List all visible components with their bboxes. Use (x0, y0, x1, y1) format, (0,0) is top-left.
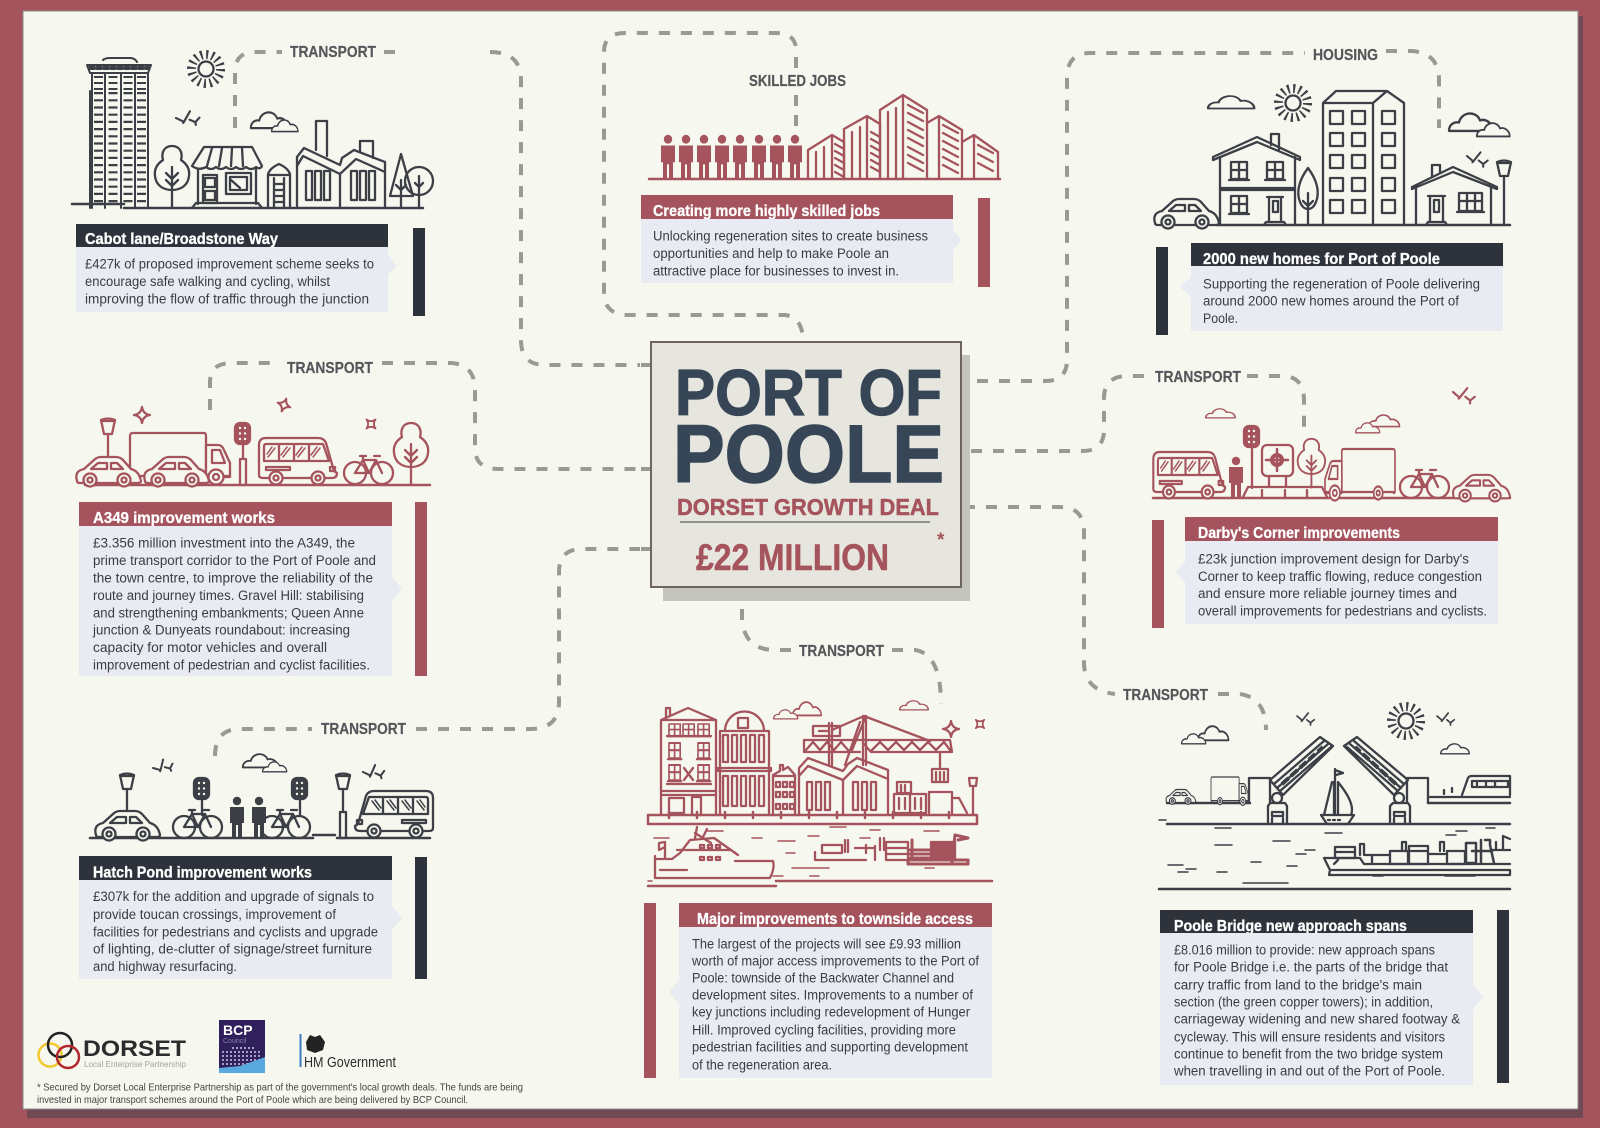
body text: encourage safe walking and cycling, whilst (85, 274, 330, 289)
side bar (415, 857, 427, 979)
card: 2000 new homes (1156, 243, 1503, 335)
icon: stars (943, 716, 988, 737)
body text: Unlocking regeneration sites to create business (653, 228, 928, 244)
icon: left bridge leaf (1249, 737, 1333, 824)
side bar (644, 903, 656, 1078)
icon: truck (1325, 449, 1395, 500)
water dashes (648, 827, 939, 881)
icon: office buildings (808, 95, 998, 179)
card: townside access (644, 903, 992, 1078)
body panel (79, 880, 392, 979)
illustration: skilled jobs (649, 95, 1000, 179)
body text: Supporting the regeneration of Poole delivering (1203, 276, 1480, 292)
icon: truck (1211, 777, 1248, 805)
body text: and ensure more reliable journey times and (1198, 586, 1457, 601)
body text: overall improvements for pedestrians and cyclists. (1198, 604, 1487, 618)
icon: bus (355, 791, 433, 838)
icon: lamp (969, 778, 977, 815)
label: transport 3: TRANSPORT (321, 721, 406, 738)
connector: top-left transport (235, 52, 651, 365)
icon: birds (175, 110, 201, 129)
body text: improvement of pedestrian and cyclist facilities. (93, 658, 370, 672)
body text: worth of major access improvements to the Port of (691, 954, 979, 968)
body text: and strengthening embankments; Queen Anne (93, 606, 364, 620)
body text (653, 228, 928, 278)
body text: development sites. Improvements to a number of (692, 988, 973, 1002)
heading: Hatch Pond improvement works (93, 864, 312, 882)
icon: lamp (120, 774, 134, 812)
body text: opportunities and help to make Poole an (653, 246, 889, 261)
body panel (1191, 266, 1503, 331)
icon: car (1166, 790, 1196, 804)
heading: Poole Bridge new approach spans (1174, 918, 1407, 935)
connector: left transport (210, 363, 651, 469)
logo: Dorset LEP: DORSET (83, 1036, 187, 1061)
panel: central title (651, 342, 970, 601)
logo: BCP Council (219, 1020, 265, 1073)
body panel (679, 927, 992, 1078)
body text: the town centre, to improve the reliability of the (93, 570, 373, 586)
icon: stars (134, 396, 380, 433)
illustration: Poole Bridge (1159, 706, 1510, 889)
side bar (1497, 910, 1509, 1083)
logo: HM Government: HM Government (304, 1054, 397, 1071)
footnote: * Secured by Dorset Local Enterprise Partnership as part of the government's local growth deals. The funds are being (37, 1082, 523, 1094)
illustration: Cabot Lane street scene (72, 54, 433, 208)
icon: bike (261, 810, 310, 838)
icon: birds (152, 757, 175, 777)
icon: cargo ship (1324, 836, 1510, 875)
body text: of the regeneration area. (692, 1058, 832, 1072)
icon: car (144, 457, 209, 486)
logo: Dorset LEP (38, 1033, 187, 1069)
icon: tree (394, 423, 428, 484)
card: Hatch Pond (79, 856, 427, 979)
side bar (1156, 247, 1168, 335)
heading: A349 improvement works (93, 510, 275, 527)
body panel (76, 247, 388, 312)
icon: apartment tower (1323, 91, 1404, 225)
icon: clouds (774, 701, 928, 719)
body text: route and journey times. Gravel Hill: stabilising (93, 588, 364, 603)
icon: bike (173, 810, 222, 838)
icon: bike (1400, 470, 1449, 498)
asterisk: * (937, 530, 945, 551)
icon: bus (1153, 452, 1225, 498)
body text: £427k of proposed improvement scheme seeks to (85, 256, 374, 272)
icon: ship (655, 827, 774, 878)
body text (691, 936, 979, 1072)
icon: traffic island (1243, 487, 1327, 497)
label: transport 4: TRANSPORT (1155, 369, 1241, 386)
body panel (1160, 933, 1473, 1085)
logo: BCP Council: BCP (223, 1022, 253, 1038)
icon: lamp (1497, 160, 1511, 225)
icon: workers (661, 135, 802, 178)
body panel (1185, 541, 1498, 624)
icon: clouds (1206, 409, 1400, 433)
icon: bus (259, 438, 337, 484)
icon: clouds (243, 754, 287, 772)
body text: section (the green copper towers); in addition, (1174, 994, 1433, 1010)
body text: and highway resurfacing. (93, 959, 237, 974)
illustration: Hatch Pond scene (90, 754, 433, 840)
illustration: Darby's Corner traffic (1153, 388, 1510, 501)
icon: trees (390, 154, 423, 208)
icon: road sign (1262, 445, 1293, 487)
body text: junction & Dunyeats roundabout: increasing (92, 622, 350, 638)
label: transport 2: TRANSPORT (287, 360, 373, 377)
icon: car (95, 811, 160, 840)
icon: right bridge leaf (1344, 737, 1428, 824)
connector: lower-left transport (215, 549, 651, 756)
body text: around 2000 new homes around the Port of (1203, 294, 1459, 308)
illustration: A349 traffic (76, 396, 430, 486)
icon: birds (362, 763, 386, 782)
body text: key junctions including redevelopment of Hunger (692, 1004, 970, 1020)
headline figure: £22 MILLION (696, 537, 889, 578)
body text: continue to benefit from the two bridge system (1174, 1046, 1443, 1062)
icon: phone box (268, 164, 290, 208)
body text: The largest of the projects will see £9.93 million (692, 936, 961, 952)
card: A349 (79, 502, 427, 676)
body text: for Poole Bridge i.e. the parts of the bridge that (1174, 960, 1448, 974)
body text: Poole: townside of the Backwater Channel and (692, 970, 954, 986)
body text (1198, 552, 1487, 618)
label: transport 1: TRANSPORT (290, 44, 376, 61)
icon: traffic light (1244, 426, 1259, 488)
icon: birds (1467, 152, 1488, 167)
icon: clouds (1208, 96, 1510, 136)
icon: bus (1430, 776, 1510, 797)
body text: facilities for pedestrians and cyclists and upgrade (93, 924, 378, 940)
body text: £23k junction improvement design for Darby's (1198, 552, 1469, 566)
icon: traffic light (194, 778, 209, 815)
body text: attractive place for businesses to invest in. (653, 264, 899, 278)
connector: housing (977, 51, 1439, 381)
icon: shop (192, 147, 262, 208)
logo: BCP Council: Council (223, 1038, 247, 1045)
card: skilled jobs (641, 195, 990, 287)
body text: Corner to keep traffic flowing, reduce congestion (1198, 569, 1482, 584)
body text: carriageway widening and new shared footway & (1174, 1012, 1460, 1026)
connector: bottom transport (742, 587, 941, 704)
body text (1203, 276, 1480, 326)
icon: arched building (718, 712, 771, 815)
card: Cabot Lane (76, 224, 425, 316)
icon: people (230, 797, 266, 838)
side bar (413, 228, 425, 316)
water dashes (1159, 820, 1495, 883)
icon: house (1213, 134, 1300, 225)
icon: car (1453, 475, 1510, 501)
footnote: invested in major transport schemes around the Port of Poole which are being delivered by BCP Council. (37, 1094, 468, 1106)
heading: 2000 new homes for Port of Poole (1203, 251, 1440, 268)
icon: small terrace (773, 765, 795, 815)
body panel (79, 526, 392, 676)
icon: warehouses (799, 758, 888, 815)
title: port of: PORT OF (675, 357, 942, 429)
label: transport 6: TRANSPORT (799, 643, 884, 660)
body text (85, 256, 374, 306)
body text (93, 889, 378, 974)
illustration: townside waterfront (648, 701, 992, 886)
illustration: housing (1154, 88, 1511, 228)
label: skilled jobs: SKILLED JOBS (749, 73, 846, 90)
heading: Creating more highly skilled jobs (653, 203, 880, 220)
body text: cycleway. This will ensure residents and visitors (1174, 1030, 1445, 1044)
icon: lamp (336, 774, 350, 838)
connector: skilled jobs (604, 33, 803, 342)
icon: truck (929, 792, 967, 813)
body text: Hill. Improved cycling facilities, providing more (692, 1022, 956, 1038)
icon: traffic light (235, 423, 250, 485)
body text: provide toucan crossings, improvement of (93, 907, 336, 922)
heading: Darby's Corner improvements (1198, 525, 1400, 542)
body text: pedestrian facilities and supporting development (692, 1040, 968, 1054)
connector: lower-right transport (964, 507, 1266, 730)
footnote (37, 1082, 523, 1106)
icon: quay (648, 812, 977, 824)
icon: traffic light (292, 778, 307, 815)
body text: when travelling in and out of the Port of Poole. (1173, 1064, 1445, 1078)
heading: Cabot lane/Broadstone Way (85, 231, 278, 248)
icon: person (1229, 457, 1243, 498)
heading: Major improvements to townside access (697, 911, 973, 928)
body text: capacity for motor vehicles and overall (93, 640, 327, 655)
logo: Dorset LEP: Local Enterprise Partnership (84, 1059, 186, 1069)
icon: containers (894, 782, 926, 813)
icon: tree (1298, 439, 1325, 488)
icon: tower block (87, 58, 151, 208)
card: Darby's Corner (1152, 517, 1498, 628)
icon: bungalow (1412, 165, 1497, 225)
body text: £307k for the addition and upgrade of signals to (93, 889, 374, 904)
icon: birds (1297, 713, 1454, 725)
icon: townhouse (661, 708, 716, 815)
body text: prime transport corridor to the Port of Poole and (93, 553, 376, 568)
icon: sun (1278, 88, 1308, 118)
icon: clouds (251, 112, 298, 132)
logo: HM Government (300, 1034, 397, 1071)
icon: crane (804, 716, 952, 782)
body panel (641, 219, 953, 283)
icon: lamp (101, 418, 115, 456)
icon: tree (1298, 168, 1318, 225)
icon: sun (192, 54, 220, 84)
body text (92, 536, 376, 672)
title: poole: POOLE (673, 409, 944, 500)
subtitle: DORSET GROWTH DEAL (677, 494, 939, 520)
side bar (1152, 520, 1164, 628)
body text: £8.016 million to provide: new approach spans (1174, 942, 1435, 958)
icon: truck (130, 433, 230, 484)
icon: clouds (1182, 726, 1469, 754)
icon: sailboat (1321, 769, 1354, 824)
card: Poole Bridge (1160, 910, 1509, 1085)
label: transport 5: TRANSPORT (1123, 687, 1208, 704)
body text: Poole. (1203, 311, 1238, 326)
connector: right transport (971, 376, 1304, 451)
body text: £3.356 million investment into the A349, the (93, 536, 355, 550)
icon: car (76, 457, 141, 486)
icon: barges (815, 835, 968, 864)
icon: birds (1453, 388, 1475, 403)
icon: factory (297, 121, 385, 208)
body text: of lighting, de-clutter of signage/street furniture (93, 942, 372, 956)
label: housing: HOUSING (1313, 47, 1378, 64)
body text (1173, 942, 1460, 1078)
icon: tree (155, 146, 189, 207)
icon: sun (1392, 706, 1420, 736)
body text: carry traffic from land to the bridge's main (1174, 978, 1422, 992)
side bar (978, 198, 990, 287)
icon: bike (344, 456, 393, 484)
side bar (415, 502, 427, 676)
body text: improving the flow of traffic through the junction (85, 292, 369, 306)
icon: car (1154, 199, 1219, 228)
